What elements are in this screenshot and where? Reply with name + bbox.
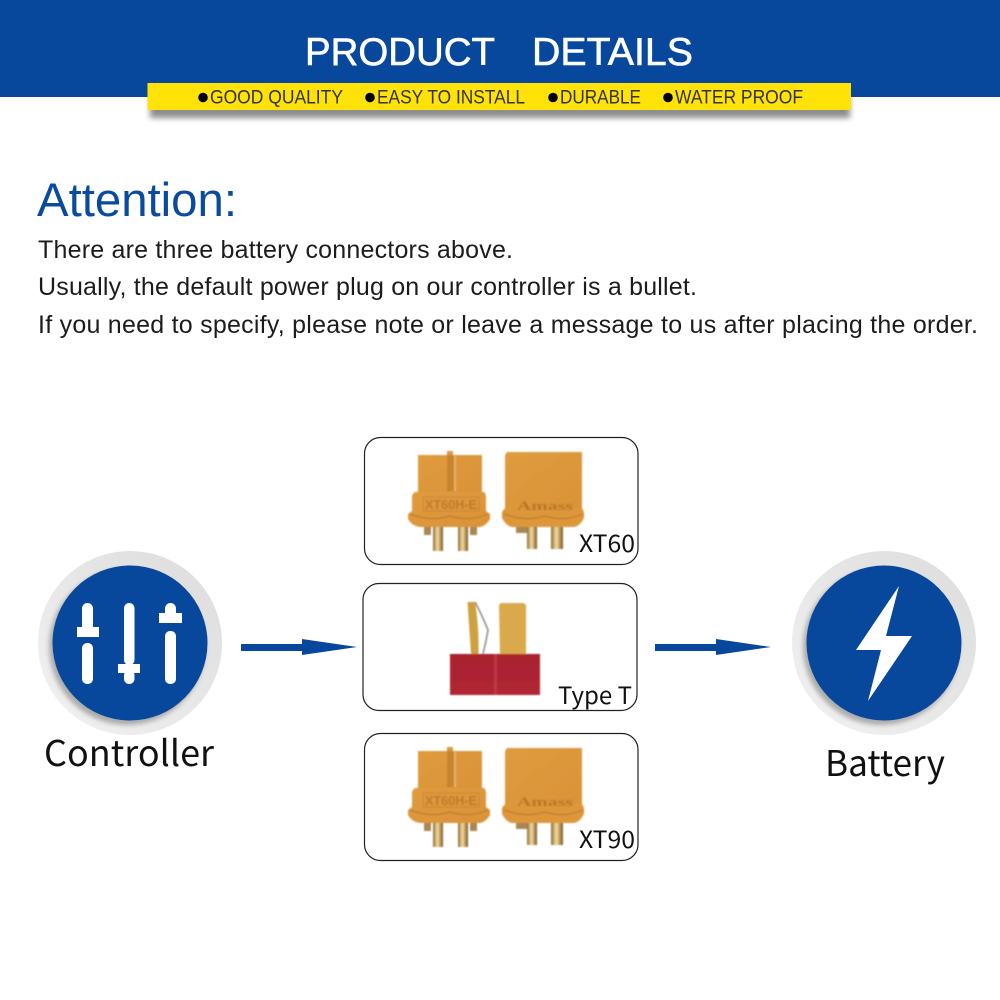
attention text bbox=[38, 236, 978, 339]
label: controller: Controller bbox=[44, 726, 214, 777]
feature: durable: DURABLE bbox=[560, 86, 641, 108]
connector: left: XT60H-E bbox=[425, 497, 477, 512]
attention text: There are three battery connectors above. bbox=[38, 236, 513, 264]
header banner bbox=[0, 0, 1000, 97]
icon: controller bbox=[38, 551, 222, 735]
feature strip bbox=[148, 83, 851, 118]
connector: left bbox=[408, 747, 490, 847]
feature: good quality: GOOD QUALITY bbox=[210, 86, 343, 108]
connector: right: Amass bbox=[517, 498, 573, 513]
connector: right: Amass bbox=[517, 794, 573, 809]
feature: easy to install: EASY TO INSTALL bbox=[377, 86, 525, 108]
connector: right bbox=[502, 452, 584, 549]
arrow: connector to battery bbox=[655, 639, 771, 655]
panel: XT60 bbox=[364, 438, 638, 564]
label: XT60: XT60 bbox=[579, 524, 635, 559]
label: XT90: XT90 bbox=[579, 820, 635, 855]
connector: right bbox=[502, 748, 584, 845]
attention heading: Attention: bbox=[37, 173, 237, 226]
connector: left: XT60H-E bbox=[425, 793, 477, 808]
attention text: If you need to specify, please note or leave a message to us after placing the order. bbox=[38, 311, 978, 339]
label: battery: Battery bbox=[825, 736, 945, 787]
label: Type T: Type T bbox=[558, 676, 632, 711]
connector: Type T bbox=[450, 602, 540, 695]
panel: XT90 bbox=[364, 734, 638, 860]
connector: left bbox=[408, 451, 490, 551]
icon: battery bbox=[792, 551, 976, 735]
title second word: DETAILS bbox=[532, 31, 693, 74]
feature: water proof: WATER PROOF bbox=[675, 86, 803, 108]
title: PRODUCT bbox=[305, 31, 495, 74]
arrow: controller to connector bbox=[241, 639, 357, 655]
panel: Type T bbox=[363, 584, 637, 711]
attention text: Usually, the default power plug on our controller is a bullet. bbox=[38, 273, 697, 301]
